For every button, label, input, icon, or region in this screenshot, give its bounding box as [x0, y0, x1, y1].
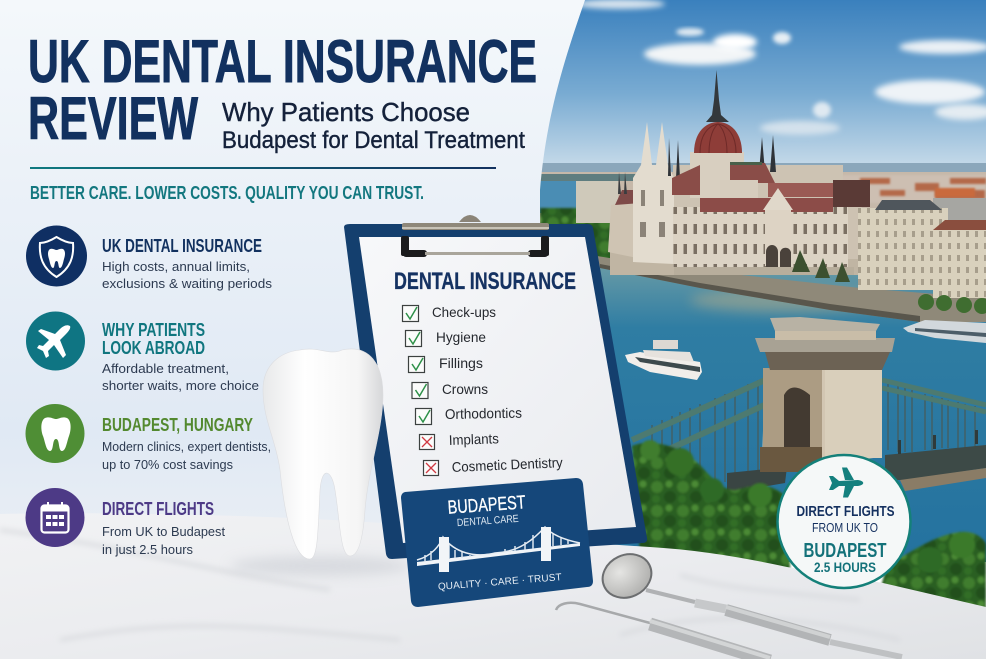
item: why patients look abroad: [26, 312, 259, 393]
description: exclusions & waiting periods: [102, 276, 273, 291]
badge: direct flights: BUDAPEST: [804, 540, 886, 562]
item: hygiene: Hygiene: [436, 329, 486, 345]
distant hills and city: [530, 163, 986, 272]
item: Budapest, Hungary: [26, 404, 271, 472]
instrument: probe: [556, 603, 770, 659]
chain bridge cables and hangers: [632, 372, 986, 482]
panel: left background with curved edge: [0, 0, 585, 540]
icon: shield with tooth: [26, 226, 87, 286]
tagline: BETTER CARE. LOWER COSTS. QUALITY YOU CAN TRUST.: [30, 183, 424, 203]
trees foreground: [632, 440, 986, 612]
item: direct flights: [26, 488, 225, 557]
item: crowns: Crowns: [442, 381, 488, 397]
hotel building: [576, 181, 618, 223]
Budapest Dental Care card: [401, 478, 593, 607]
right buildings: [858, 198, 986, 314]
clipboard checklist: [344, 215, 647, 559]
river cruise boat left: [625, 340, 702, 380]
bridge tower: [755, 317, 895, 472]
drum and dome: [690, 152, 744, 198]
icon: plane: [829, 468, 863, 498]
trees in front of parliament: [792, 250, 850, 282]
heading: BUDAPEST, HUNGARY: [102, 415, 253, 435]
marble table: [0, 513, 986, 659]
subtitle: Why Patients Choose: [222, 97, 470, 127]
title: UK DENTAL INSURANCE: [28, 28, 537, 95]
river cruise boat right: [903, 320, 986, 343]
main facade: [673, 207, 848, 267]
description: From UK to Budapest: [102, 524, 225, 539]
big white tooth model: [263, 349, 383, 559]
heading: DIRECT FLIGHTS: [102, 499, 214, 519]
card subtitle: DENTAL CARE: [456, 513, 519, 529]
instrument: mouth mirror: [595, 546, 902, 657]
description: shorter waits, more choice: [102, 378, 259, 393]
description: Affordable treatment,: [102, 361, 229, 376]
icon: plane: [26, 312, 85, 370]
backing mass: [673, 165, 843, 215]
item: fillings: [408, 355, 483, 372]
item: cosmetic dentistry: Cosmetic Dentistry: [451, 454, 563, 475]
paper sheet: [359, 237, 636, 543]
description: Modern clinics, expert dentists,: [102, 439, 271, 454]
badge: direct flights: 2.5 HOURS: [814, 559, 876, 575]
badge text: DIRECT FLIGHTS: [796, 503, 894, 520]
card title: BUDAPEST: [447, 492, 527, 519]
item: implants: [420, 430, 499, 450]
title: REVIEW: [28, 85, 198, 152]
checklist heading: DENTAL INSURANCE: [394, 268, 576, 295]
photo: Budapest panorama: [530, 0, 986, 612]
checklist items: [402, 304, 563, 476]
subtitle: [222, 97, 525, 154]
heading: UK DENTAL INSURANCE: [102, 236, 262, 256]
embankment: [597, 256, 986, 322]
description: High costs, annual limits,: [102, 259, 250, 274]
icon: calendar: [26, 488, 84, 547]
card tagline: QUALITY · CARE · TRUST: [438, 572, 562, 593]
item: fillings: Fillings: [439, 355, 483, 371]
bridge deck: [727, 430, 986, 493]
twin towers: [633, 122, 674, 264]
river: [540, 262, 986, 562]
metal clip: [401, 215, 549, 257]
item: crowns: [412, 381, 488, 398]
title: [28, 28, 537, 152]
bridge logo: [417, 527, 580, 572]
subtitle: Budapest for Dental Treatment: [222, 127, 525, 154]
item: check-ups: [402, 304, 496, 322]
description: up to 70% cost savings: [102, 457, 233, 472]
description: in just 2.5 hours: [102, 542, 193, 557]
heading: WHY PATIENTS: [102, 320, 205, 340]
card base: [401, 478, 593, 607]
item: check-ups: Check-ups: [432, 304, 496, 320]
heading: LOOK ABROAD: [102, 338, 205, 358]
sky with clouds: [530, 0, 986, 170]
item: orthodontics: [416, 405, 522, 424]
dental instruments: [556, 546, 902, 659]
parliament building: [608, 70, 870, 275]
icon: tooth: [26, 404, 84, 463]
badge: direct flights: FROM UK TO: [812, 520, 878, 535]
item: hygiene: [406, 329, 486, 346]
divider: [30, 167, 496, 169]
badge: direct flights: [778, 455, 910, 588]
clipboard board: [344, 224, 647, 559]
item: UK dental insurance: [26, 226, 273, 291]
trees behind clipboard: [540, 208, 614, 264]
upper roofs: [672, 165, 700, 195]
left wing: [608, 200, 637, 258]
item: implants: Implants: [449, 430, 499, 448]
item: orthodontics: Orthodontics: [445, 405, 522, 422]
small spires: [668, 135, 776, 178]
